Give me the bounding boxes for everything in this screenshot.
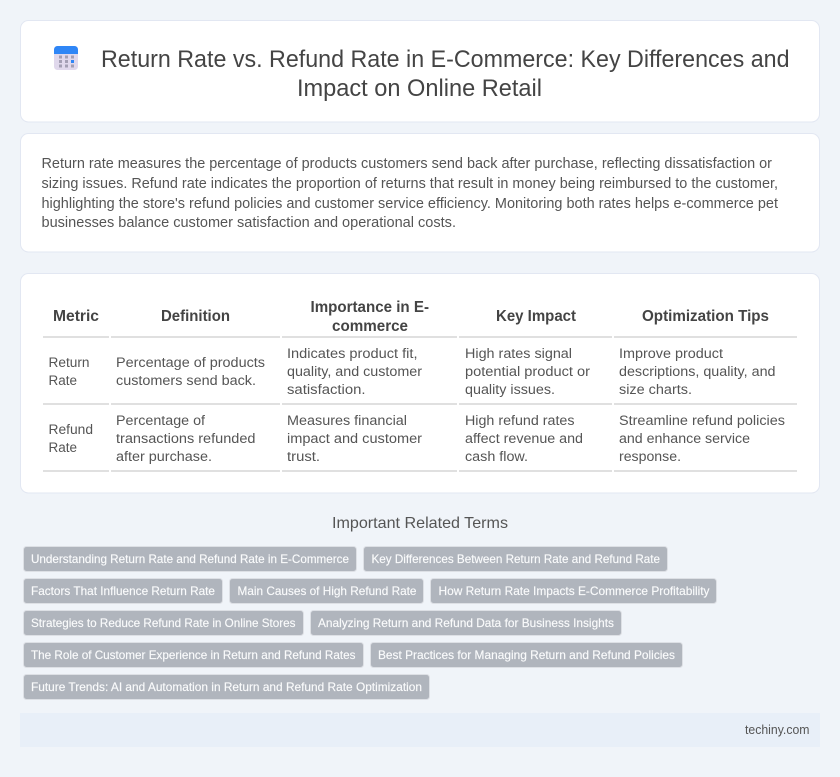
table row: return rate: Rate [48, 373, 77, 389]
tag [364, 546, 668, 572]
heading: important related terms: Important Related Terms [332, 515, 508, 532]
table header row: Optimization Tips [642, 308, 769, 325]
footer bar [20, 713, 820, 747]
table row: refund rate: Rate [48, 440, 77, 456]
title: Impact on Online Retail [297, 75, 542, 102]
icon: calendar [54, 46, 78, 70]
table row: return rate: satisfaction. [287, 382, 366, 398]
tag: Strategies to Reduce Refund Rate in Online Stores [31, 616, 296, 630]
tag [24, 674, 430, 700]
table row: return rate: potential product or [465, 364, 590, 380]
table row: return rate: quality, and customer [287, 364, 422, 380]
panel: summary paragraph [20, 134, 820, 252]
tag: The Role of Customer Experience in Return and Refund Rates [31, 648, 356, 662]
table row: return rate: quality issues. [465, 382, 555, 398]
tag: How Return Rate Impacts E-Commerce Profitability [438, 584, 710, 598]
tag [430, 578, 716, 604]
table header row: Key Impact [496, 308, 576, 325]
tag: Factors That Influence Return Rate [31, 584, 215, 598]
table row: refund rate: Refund [48, 422, 93, 438]
tag [24, 546, 356, 572]
table row: refund rate: transactions refunded [116, 431, 256, 447]
table row: refund rate: Streamline refund policies [619, 413, 785, 429]
table header row: Metric [53, 308, 99, 325]
table row: refund rate: affect revenue and [465, 431, 583, 447]
tag [310, 610, 622, 636]
tag: Key Differences Between Return Rate and Refund Rate [372, 552, 660, 566]
table row: return rate: descriptions, quality, and [619, 364, 776, 380]
table row: return rate: Return [48, 355, 90, 371]
table header row: commerce [332, 318, 408, 335]
table row: refund rate: cash flow. [465, 449, 528, 465]
tag [24, 642, 364, 668]
table row: refund rate: impact and customer [287, 431, 422, 447]
tag: Best Practices for Managing Return and Refund Policies [378, 648, 675, 662]
tag [230, 578, 424, 604]
related term tags [24, 546, 716, 700]
table header row: Importance in E- [310, 299, 429, 316]
tag [370, 642, 682, 668]
text block: summary [42, 156, 778, 231]
tag: Future Trends: AI and Automation in Return and Refund Rate Optimization [31, 680, 422, 694]
panel: comparison table [20, 274, 820, 493]
table row: return rate: High rates signal [465, 346, 572, 362]
text block: summary: sizing issues. Refund rate indicates the proportion of returns that result in money being reimbursed to the customer, [42, 176, 778, 192]
table row: return rate: size charts. [619, 382, 692, 398]
text block: summary: Return rate measures the percentage of products customers send back after purchase, reflecting dissatisfaction or [42, 156, 772, 172]
table header row: Definition [161, 308, 230, 325]
table row: return rate [48, 346, 776, 398]
table header row [53, 299, 769, 335]
tag [24, 578, 222, 604]
table row: refund rate: response. [619, 449, 681, 465]
table row: return rate: Improve product [619, 346, 723, 362]
text block: summary: businesses balance customer satisfaction and operational costs. [42, 215, 456, 231]
table row: refund rate: and enhance service [619, 431, 750, 447]
tag: Analyzing Return and Refund Data for Business Insights [318, 616, 614, 630]
table row: refund rate: trust. [287, 449, 320, 465]
tag: Understanding Return Rate and Refund Rate in E-Commerce [31, 552, 349, 566]
text block: summary: highlighting the store's refund policies and customer service efficiency. Monitoring both rates helps e-commerce pet [42, 196, 778, 212]
title: Return Rate vs. Refund Rate in E-Commerce: Key Differences and [101, 46, 790, 73]
tag: Main Causes of High Refund Rate [238, 584, 417, 598]
table row: refund rate: High refund rates [465, 413, 574, 429]
table row: refund rate: Percentage of [116, 413, 205, 429]
table row: refund rate: after purchase. [116, 449, 212, 465]
table row: return rate: Percentage of products [116, 355, 265, 371]
table row: refund rate: Measures financial [287, 413, 407, 429]
title [101, 46, 790, 102]
footer source text: techiny.com [745, 722, 810, 737]
panel: title header [20, 20, 820, 122]
table row: refund rate [48, 413, 785, 465]
table row: return rate: customers send back. [116, 373, 256, 389]
table row: return rate: Indicates product fit, [287, 346, 418, 362]
tag [24, 610, 304, 636]
